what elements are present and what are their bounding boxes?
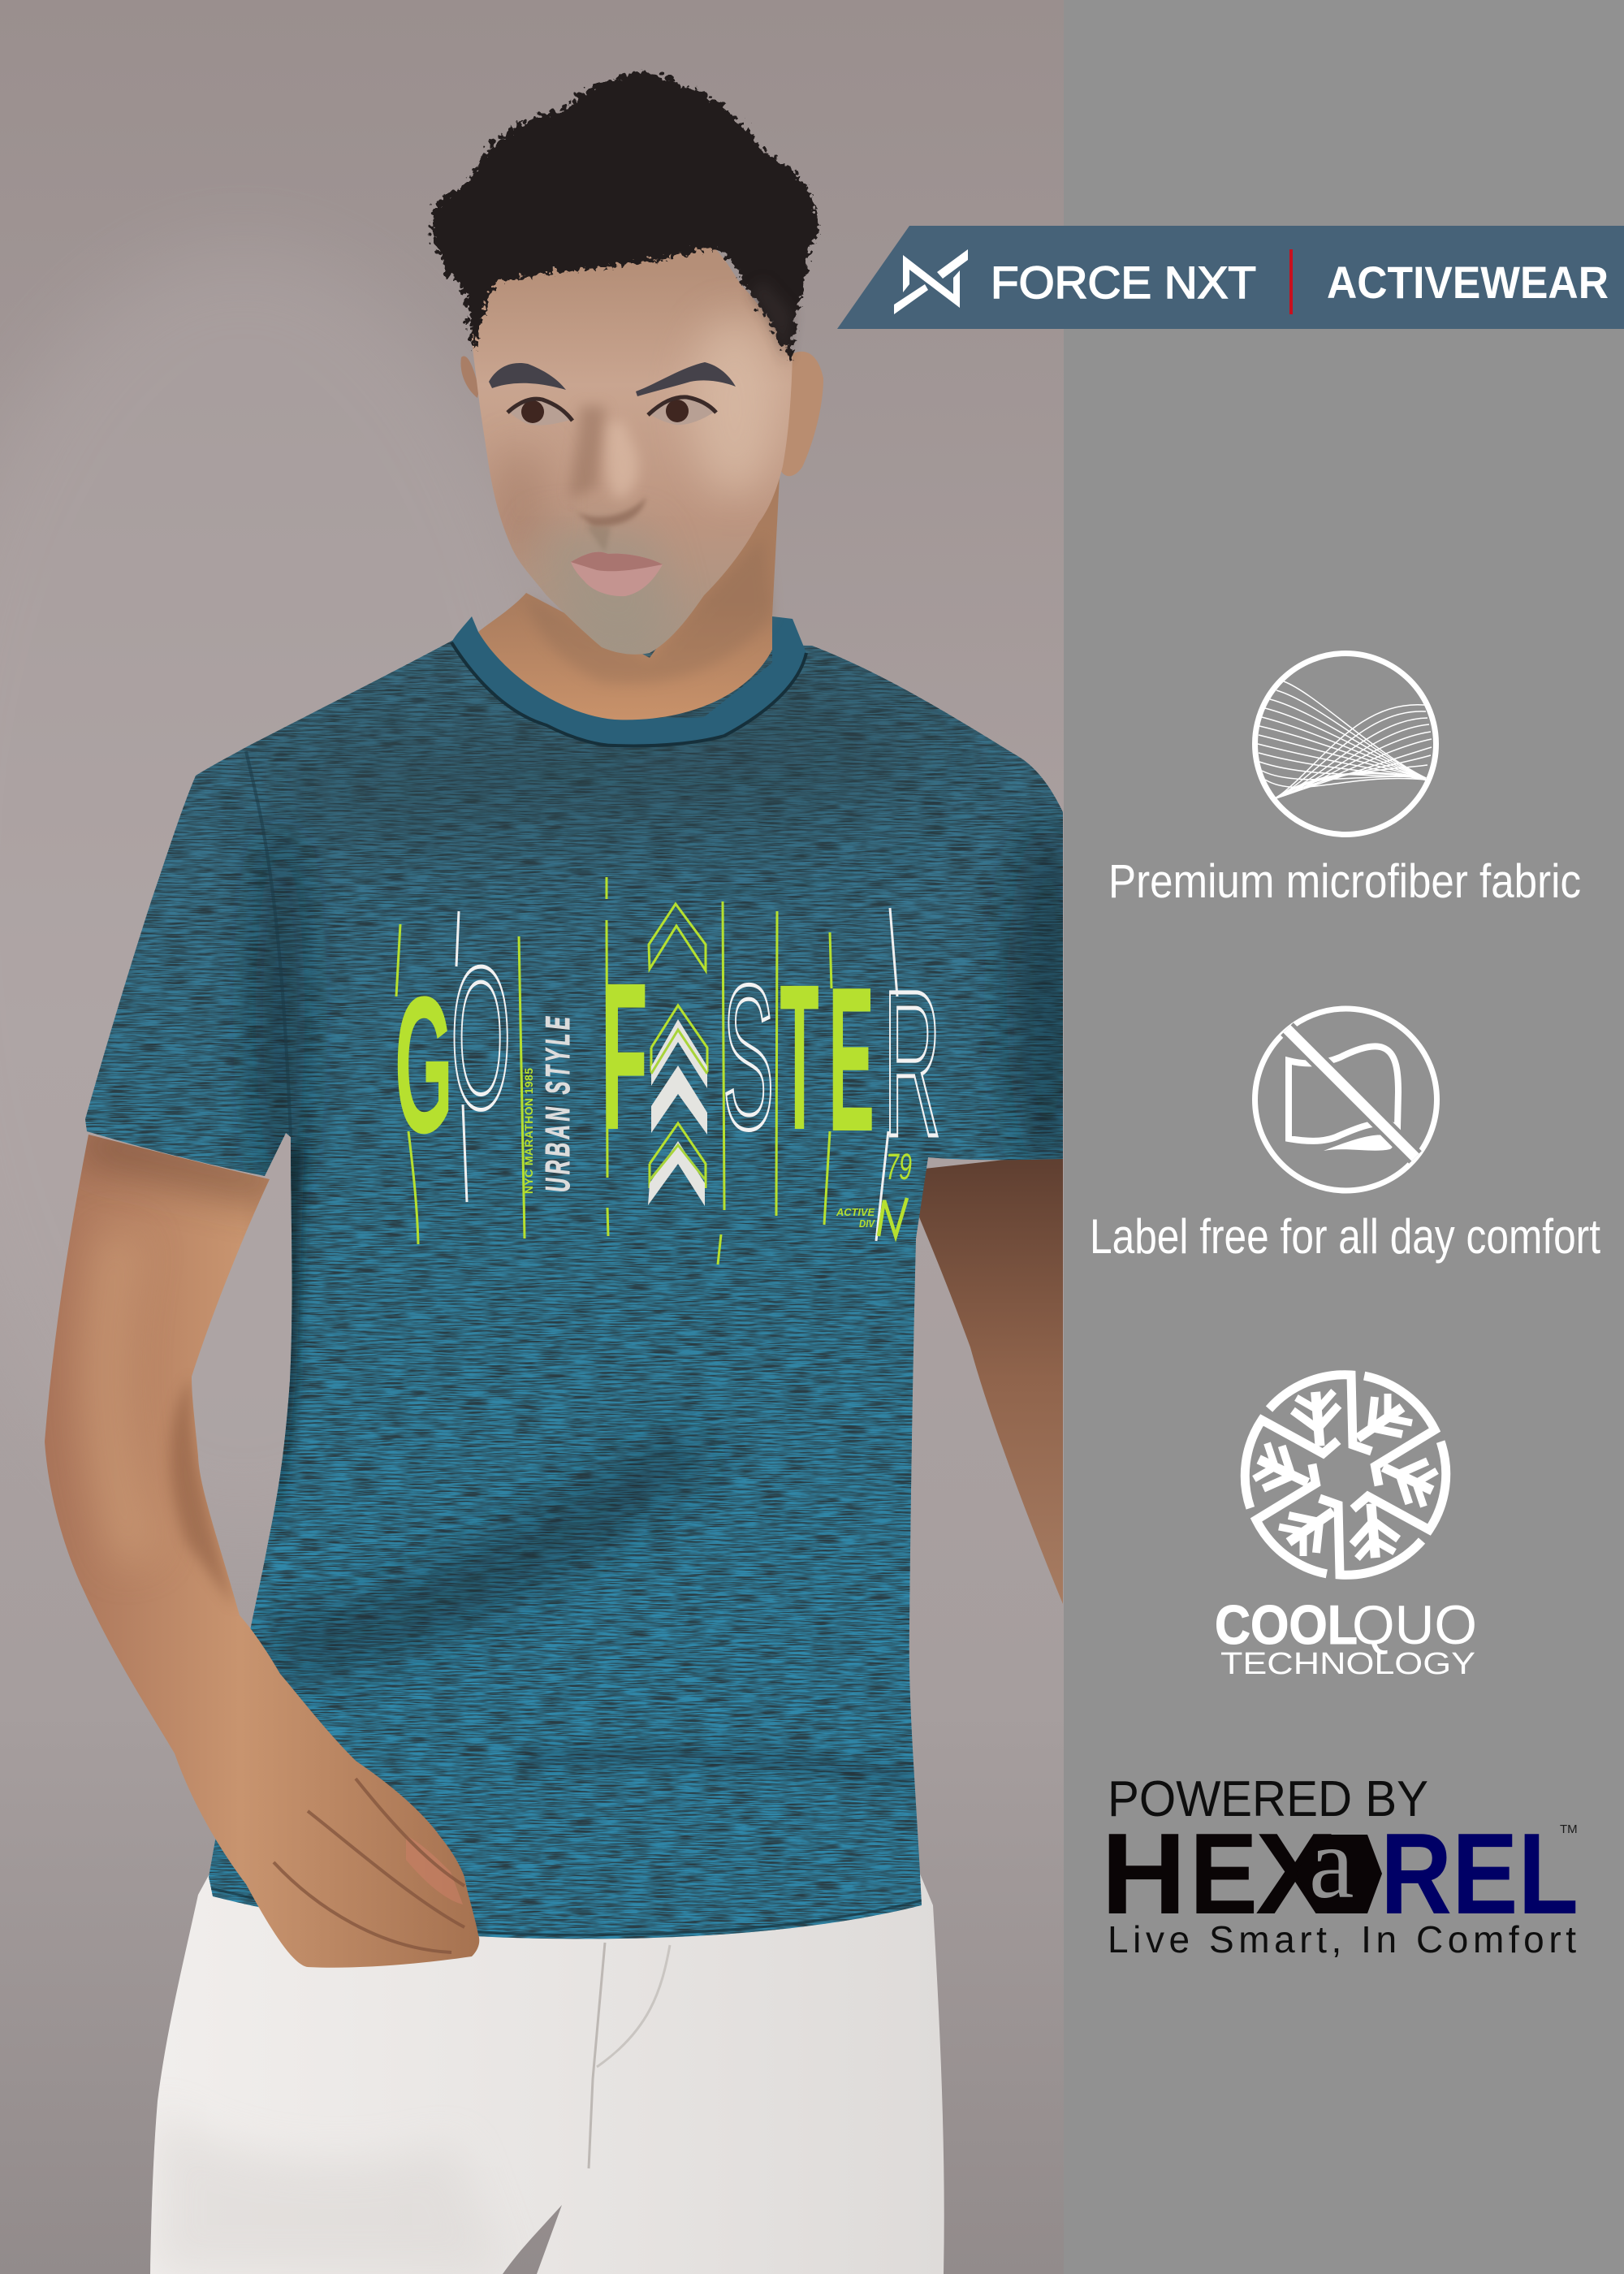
lips bbox=[571, 552, 663, 596]
print: active div: ACTIVE bbox=[836, 1206, 875, 1218]
eyebrows bbox=[489, 363, 566, 390]
t-shirt bbox=[73, 633, 1088, 1949]
print: active div bbox=[836, 1206, 875, 1230]
REL letters: REL bbox=[1380, 1809, 1579, 1939]
fingers bbox=[274, 1779, 464, 1952]
collar bbox=[451, 616, 806, 746]
brand name: FORCE NXT bbox=[991, 257, 1256, 308]
letter E: E bbox=[828, 945, 875, 1175]
technology wordmark: TECHNOLOGY bbox=[1220, 1647, 1475, 1681]
letter X: X bbox=[1255, 1809, 1335, 1939]
print: urban style: URBAN STYLE bbox=[539, 1016, 577, 1192]
vertical print lines bbox=[396, 877, 831, 1265]
icon: snowflake bbox=[1220, 1359, 1471, 1591]
letter H: H bbox=[1101, 1809, 1186, 1939]
tagline: Live Smart, In Comfort bbox=[1108, 1918, 1576, 1961]
head bbox=[426, 69, 823, 658]
letter F: F bbox=[603, 940, 648, 1174]
letter R: R bbox=[883, 949, 941, 1180]
print: small logo bbox=[879, 1198, 907, 1236]
collar seam bbox=[451, 642, 806, 746]
letter T: T bbox=[780, 942, 819, 1174]
hexarel logo block bbox=[1101, 1771, 1579, 1961]
neck bbox=[478, 477, 780, 720]
hexagon with a bbox=[1296, 1808, 1382, 1920]
model photo illustration bbox=[45, 69, 1088, 2274]
icon: fabric weave bbox=[1255, 653, 1436, 835]
right grey panel bbox=[1064, 0, 1624, 2274]
coolquo wordmark: COOL: COOL bbox=[1215, 1594, 1358, 1656]
category: ACTIVEWEAR bbox=[1327, 257, 1609, 308]
brand banner bbox=[837, 226, 1624, 329]
feature: coolquo bbox=[1215, 1359, 1477, 1681]
eyes bbox=[509, 400, 571, 426]
icon: brand logo bbox=[894, 249, 968, 314]
ears bbox=[780, 352, 823, 476]
letter S: S bbox=[723, 943, 774, 1172]
letter O: O bbox=[451, 924, 511, 1151]
white shorts bbox=[150, 1868, 944, 2274]
print: active div: DIV bbox=[859, 1217, 875, 1230]
hexagon with a: a bbox=[1309, 1808, 1354, 1920]
neck shadow bbox=[526, 536, 772, 684]
letter E: E bbox=[1190, 1809, 1258, 1939]
face bbox=[472, 244, 793, 655]
icon: no label bbox=[1255, 1009, 1437, 1191]
photo background bbox=[0, 0, 1064, 2274]
divider bbox=[1289, 249, 1293, 314]
print: NYC marathon: NYC MARATHON 1985 bbox=[522, 1068, 535, 1194]
feature: label free bbox=[1090, 1009, 1600, 1264]
print: 79: 79 bbox=[886, 1146, 912, 1187]
letter G: G bbox=[395, 955, 453, 1174]
right arm bbox=[916, 1153, 1063, 1604]
shirt print: GO FASTER graphic bbox=[395, 877, 941, 1265]
left arm and hand bbox=[45, 1135, 479, 1968]
powered by: POWERED BY bbox=[1108, 1771, 1428, 1827]
feature: microfiber bbox=[1108, 653, 1581, 908]
trademark: TM bbox=[1560, 1822, 1578, 1836]
coolquo wordmark: QUO: QUO bbox=[1352, 1594, 1477, 1656]
print: chevrons bbox=[648, 904, 707, 1206]
hair bbox=[426, 69, 814, 361]
